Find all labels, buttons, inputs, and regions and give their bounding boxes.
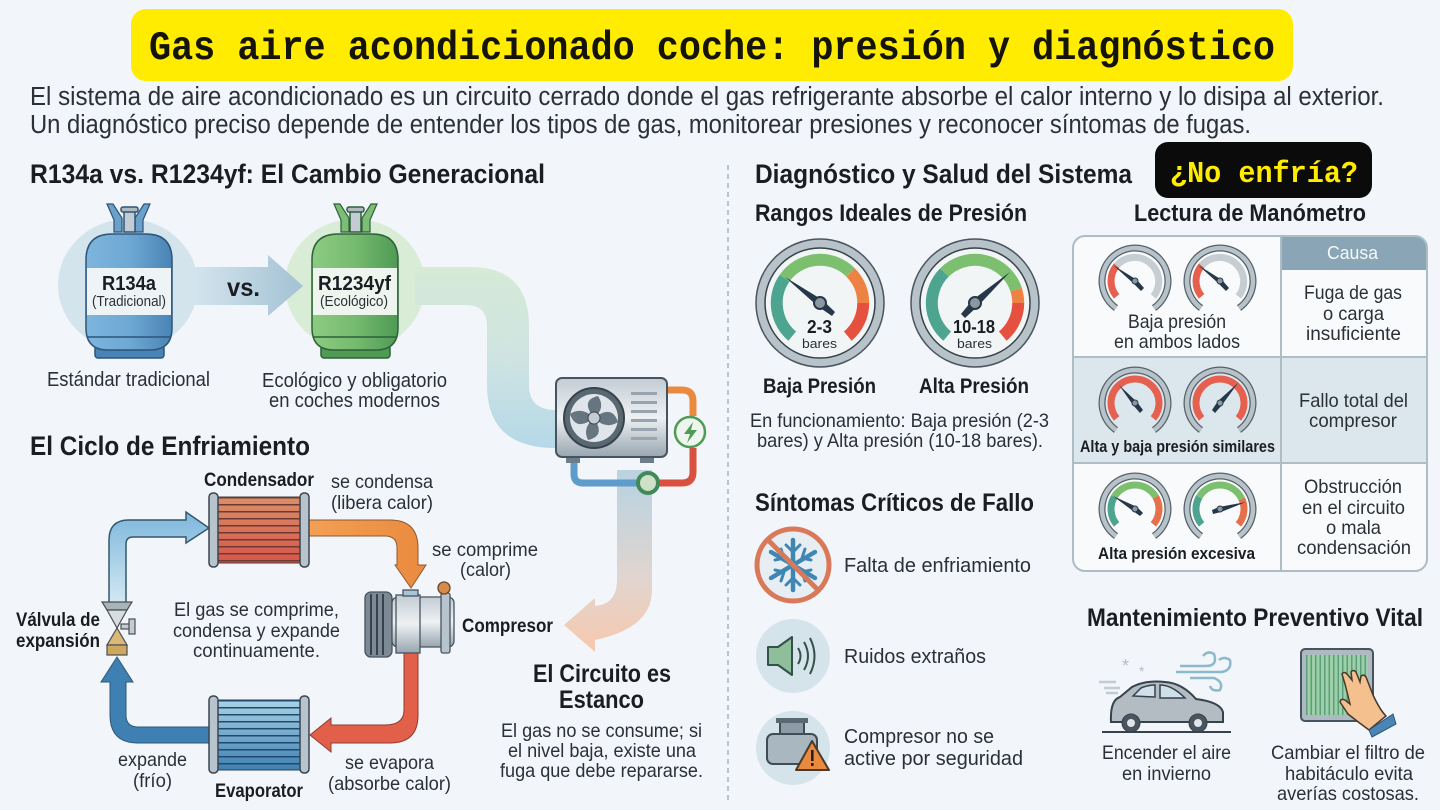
icon: AC unit — [556, 378, 705, 493]
arrow: evaporator to valve — [101, 657, 212, 743]
intro text — [30, 83, 1384, 139]
table header: Causa — [1327, 243, 1379, 263]
row 3 cause: Obstrucción — [1304, 476, 1402, 498]
sealed circuit note: El gas no se consume; si — [501, 720, 702, 742]
gauge value: high: bares — [957, 336, 993, 351]
row 1 cause: insuficiente — [1306, 323, 1401, 345]
icon: cabin filter and hand — [1301, 649, 1396, 737]
arrow: compressor to evaporator — [310, 650, 418, 752]
icon: expansion valve — [102, 602, 135, 655]
row 1 gauges: low both — [1102, 248, 1253, 308]
heading: pressure ranges: Rangos Ideales de Presión — [755, 200, 1027, 227]
gauge value: high — [953, 317, 995, 351]
vs label: vs. — [227, 274, 260, 302]
label: expansion valve: Válvula de — [16, 610, 100, 631]
row 3 label: Alta presión excesiva — [1098, 544, 1255, 563]
gauge value: high: 10-18 — [953, 317, 995, 337]
row 1 label: Baja presión — [1128, 311, 1226, 333]
gauge captions: Baja Presión — [763, 375, 876, 398]
symptom: no cooling: Falta de enfriamiento — [844, 555, 1031, 577]
label: expande — [118, 749, 187, 792]
cylinder label R134a: R134a — [102, 273, 157, 295]
caption: R1234yf — [262, 370, 447, 412]
table: manometer readings — [1073, 236, 1427, 571]
row 1 cause: Fuga de gas — [1304, 282, 1402, 304]
row 1 label — [1114, 311, 1240, 353]
icon: no cooling — [757, 529, 829, 601]
icon: car with winter air — [1099, 652, 1231, 732]
cycle description: condensa y expande — [173, 620, 340, 642]
row 3 gauges: excessive high — [1102, 476, 1253, 536]
cylinder label R134a — [92, 273, 166, 310]
pressure note — [750, 410, 1049, 452]
title banner — [131, 9, 1293, 81]
row 2 label: Alta y baja presión similares — [1080, 437, 1275, 456]
sealed circuit note: fuga que debe repararse. — [500, 760, 703, 782]
heading: symptoms: Síntomas Críticos de Fallo — [755, 489, 1034, 517]
cooling cycle diagram — [16, 470, 554, 802]
icon: evaporator — [209, 696, 309, 773]
row 3 cause: condensación — [1297, 537, 1411, 559]
icon: condenser — [209, 493, 309, 567]
gauge captions: Alta Presión — [919, 375, 1029, 398]
gauge value: low: bares — [802, 336, 838, 351]
icon: compressor warning — [756, 711, 830, 785]
label: se condensa — [331, 471, 433, 514]
divider — [727, 165, 729, 800]
row 2 cause: compresor — [1309, 410, 1397, 432]
symptom: compressor: Compresor no se — [844, 726, 994, 748]
cylinder label R1234yf: R1234yf — [318, 273, 391, 295]
heading: diagnosis: Diagnóstico y Salud del Sistema — [755, 159, 1133, 189]
row 3 cause: o mala — [1326, 517, 1381, 539]
caption: R1234yf: en coches modernos — [269, 390, 440, 412]
halo and ribbon to AC unit — [58, 219, 556, 448]
icon: car with winter air: * — [1122, 656, 1129, 676]
arrow: condenser to compressor — [305, 520, 426, 588]
sealed circuit note: el nivel baja, existe una — [508, 740, 696, 762]
caption: R1234yf: Ecológico y obligatorio — [262, 370, 447, 392]
row 2 cause — [1299, 390, 1408, 432]
caption: R134a: Estándar tradicional — [47, 369, 210, 391]
icon: R1234yf cylinder — [312, 204, 398, 358]
cylinder label R1234yf — [318, 273, 391, 310]
caption: filter — [1271, 742, 1425, 805]
symptom: compressor: active por seguridad — [844, 748, 1023, 770]
label: expande: expande — [118, 749, 187, 771]
row 1 label: en ambos lados — [1114, 331, 1240, 353]
symptom: noises: Ruidos extraños — [844, 646, 986, 668]
label: expansion valve: expansión — [16, 631, 100, 652]
gauge value: low — [802, 317, 838, 351]
label: se comprime: se comprime — [432, 539, 538, 561]
label: expande: (frío) — [133, 770, 172, 792]
intro text: El sistema de aire acondicionado es un circuito cerrado donde el gas refrigerante absorbe el calor interno y lo disipa al exterior. — [30, 83, 1384, 111]
cycle description: continuamente. — [193, 640, 320, 662]
callout: no enfria: ¿No enfría? — [1170, 157, 1358, 192]
label: se evapora — [328, 752, 451, 795]
label: se evapora: (absorbe calor) — [328, 773, 451, 795]
pressure note: bares) y Alta presión (10-18 bares). — [757, 430, 1043, 452]
symptom: compressor — [844, 726, 1023, 770]
label: se comprime — [432, 539, 538, 581]
heading: R134a vs R1234yf: R134a vs. R1234yf: El Cambio Generacional — [30, 159, 545, 189]
caption: winter air — [1102, 742, 1231, 785]
pressure note: En funcionamiento: Baja presión (2-3 — [750, 410, 1049, 432]
icon: strange noises — [756, 619, 830, 693]
row 1 cause — [1304, 282, 1402, 345]
row 1 cause: o carga — [1323, 303, 1384, 325]
row 2 gauges: similar — [1102, 370, 1253, 430]
cycle description: El gas se comprime, — [174, 599, 339, 621]
arrow: R134a to R1234yf — [195, 255, 303, 316]
gauge: high pressure — [911, 239, 1039, 367]
sealed circuit note: El Circuito es — [533, 660, 671, 688]
icon: R134a cylinder — [86, 204, 172, 358]
label: compressor: Compresor — [462, 616, 554, 637]
label: se condensa: (libera calor) — [331, 492, 433, 514]
heading: cooling cycle: El Ciclo de Enfriamiento — [30, 431, 310, 461]
icon: car with winter air: * — [1139, 663, 1145, 679]
row 3 cause: en el circuito — [1302, 497, 1405, 519]
icon: compressor — [365, 582, 454, 657]
callout: no enfria — [1155, 142, 1372, 198]
sealed circuit note: Estanco — [559, 686, 644, 714]
caption: winter air: en invierno — [1122, 763, 1211, 785]
arrow: AC unit to sealed circuit note — [564, 470, 652, 652]
label: expansion valve — [16, 610, 100, 652]
caption: winter air: Encender el aire — [1102, 742, 1231, 764]
caption: filter: Cambiar el filtro de — [1271, 742, 1425, 764]
title banner: Gas aire acondicionado coche: presión y diagnóstico — [149, 26, 1275, 72]
label: se evapora: se evapora — [345, 752, 434, 774]
label: se condensa: se condensa — [331, 471, 433, 493]
gauge: low pressure — [756, 239, 884, 367]
arrow: valve to condenser — [109, 512, 209, 605]
label: se comprime: (calor) — [460, 559, 511, 581]
cycle description — [173, 599, 340, 662]
row 2 cause: Fallo total del — [1299, 390, 1408, 412]
cylinder label R134a: (Tradicional) — [92, 294, 166, 310]
caption: filter: habitáculo evita — [1285, 763, 1413, 785]
gauge value: low: 2-3 — [807, 317, 832, 337]
label: evaporator: Evaporator — [215, 781, 304, 802]
caption: filter: averías costosas. — [1277, 783, 1419, 805]
row 3 cause — [1297, 476, 1411, 559]
gauge captions — [763, 375, 1029, 398]
heading: manometer: Lectura de Manómetro — [1134, 200, 1366, 227]
cylinder label R1234yf: (Ecológico) — [320, 294, 388, 310]
sealed circuit note — [500, 660, 703, 782]
label: condenser: Condensador — [204, 470, 315, 491]
intro text: Un diagnóstico preciso depende de entender los tipos de gas, monitorear presiones y reconocer síntomas de fugas. — [30, 111, 1251, 139]
